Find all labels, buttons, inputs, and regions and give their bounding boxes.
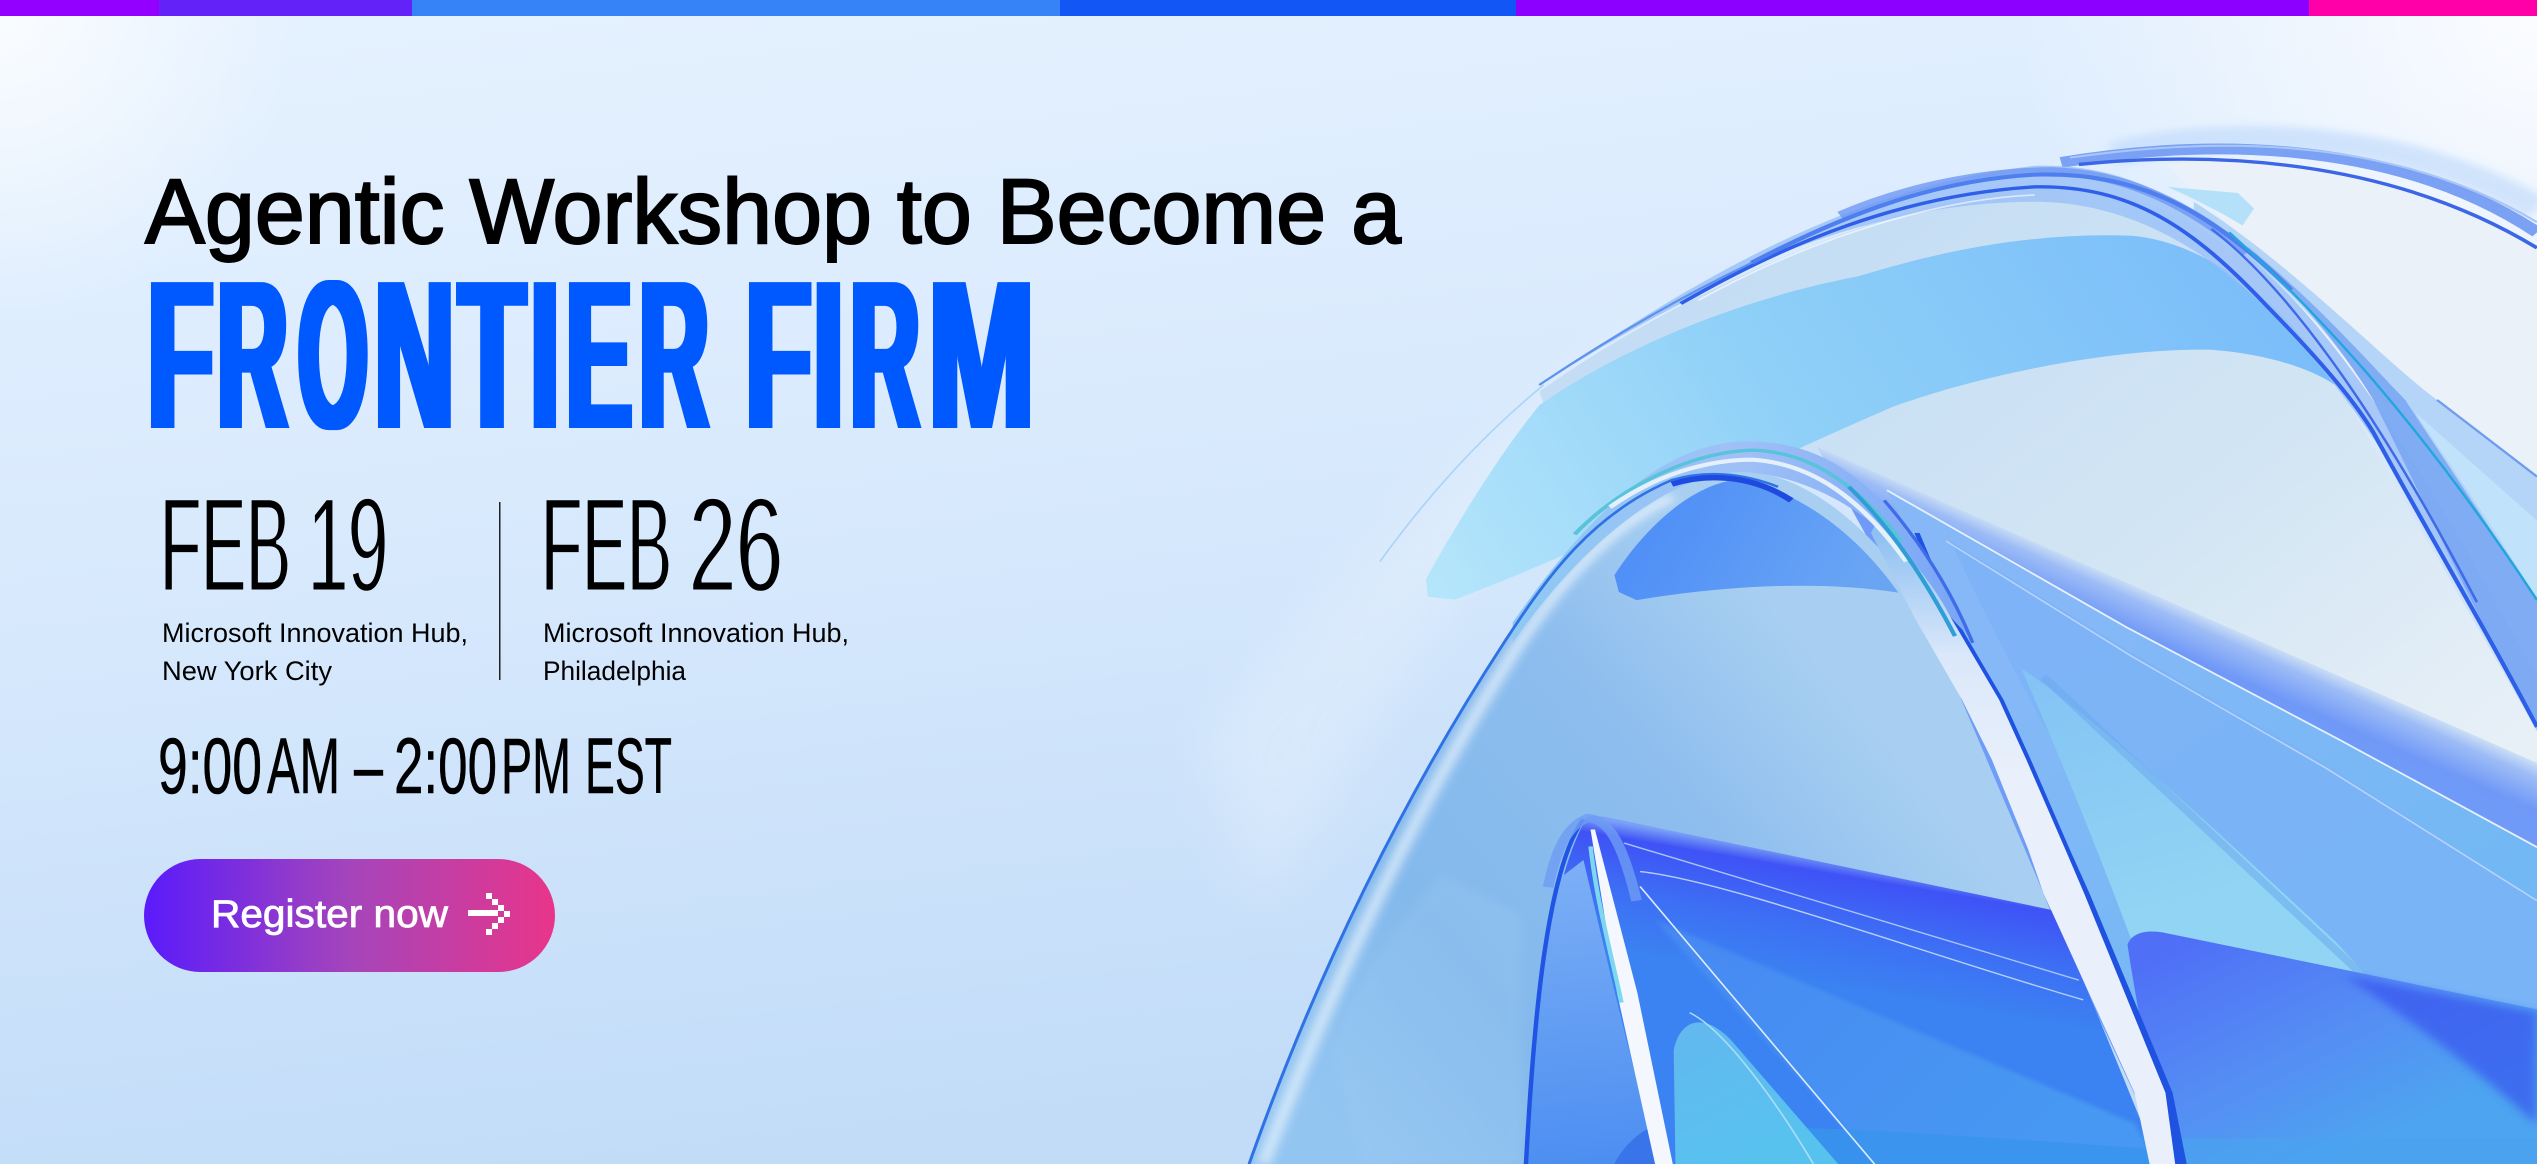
date heading: Feb 26: FEB <box>541 471 672 620</box>
inner panel of middle arch <box>1250 472 2050 1164</box>
small arch dark panel <box>1526 816 2158 1164</box>
date heading: Feb 19: FEB <box>160 471 291 620</box>
heading line: Agentic Workshop to Become a <box>145 161 1402 263</box>
title: FRONTIER FIRM: I <box>814 236 843 473</box>
glass arches artwork <box>1203 138 2537 1164</box>
white stripe of right leg <box>1871 507 2175 1164</box>
title: FRONTIER FIRM: F <box>148 236 213 473</box>
venue: New York: Microsoft Innovation Hub, <box>162 618 468 648</box>
cyan facet <box>1674 1022 1838 1164</box>
top colour bar <box>0 0 2537 16</box>
venue: Philadelphia: Microsoft Innovation Hub, <box>543 618 849 648</box>
title: FRONTIER FIRM: M <box>928 236 1034 473</box>
dark edge of right leg <box>1914 533 2187 1164</box>
time: 9:00 <box>158 721 262 810</box>
blue blob under crest <box>1614 480 1898 600</box>
deep blue lower right panels <box>2127 931 2537 1164</box>
venue: Philadelphia <box>543 618 849 686</box>
panel lines <box>1624 843 2083 1164</box>
small arch white stripe <box>1591 829 1673 1164</box>
top right pale panel <box>2298 303 2537 475</box>
title: FRONTIER FIRM: E <box>566 236 632 473</box>
pale inner area of the big arch <box>1539 188 2537 785</box>
title: FRONTIER FIRM: N <box>375 236 454 473</box>
soft halo behind arches <box>1234 564 1424 852</box>
date heading: Feb 26: 26 <box>689 471 783 620</box>
inner edge glow of left leg <box>1263 497 1672 1164</box>
title: FRONTIER FIRM: R <box>218 236 288 473</box>
big arch crest crescent <box>1539 166 2537 731</box>
title: FRONTIER FIRM: R <box>851 236 920 473</box>
title: FRONTIER FIRM: R <box>640 236 708 473</box>
date heading: Feb 19: 19 <box>308 471 388 620</box>
small arch edges <box>1526 818 1637 1164</box>
time: 2:00 <box>394 721 497 810</box>
time: PM <box>501 721 571 810</box>
title: FRONTIER FIRM: O <box>298 236 367 473</box>
venue: New York <box>162 618 468 686</box>
title: FRONTIER FIRM: T <box>459 236 525 473</box>
right glass sheet <box>1817 447 2537 1164</box>
big arch lines <box>1539 171 2537 727</box>
lower blue facet <box>1661 924 2147 1151</box>
back arch <box>2061 138 2537 248</box>
title: FRONTIER FIRM <box>148 236 1035 473</box>
title: FRONTIER FIRM: F <box>746 236 811 473</box>
small arch left inner <box>1526 860 1659 1164</box>
big arch right strands <box>2194 202 2537 727</box>
sky blue ribbon <box>1426 235 2340 599</box>
venue: Philadelphia: Philadelphia <box>543 656 687 686</box>
small cyan fin <box>2167 187 2254 226</box>
time: EST <box>585 721 672 810</box>
register button <box>144 859 555 972</box>
title: FRONTIER FIRM: I <box>531 236 559 473</box>
lighter facet in left leg <box>1331 874 1522 1164</box>
divider <box>499 502 500 680</box>
time: AM <box>267 721 340 810</box>
crest lines <box>1249 450 1973 1164</box>
time <box>158 721 672 810</box>
icon: pixel arrow <box>468 893 510 935</box>
crest of middle arch <box>1513 441 1968 643</box>
register button: Register now <box>211 893 449 936</box>
venue: New York: New York City <box>162 656 332 686</box>
time: – <box>354 721 383 810</box>
